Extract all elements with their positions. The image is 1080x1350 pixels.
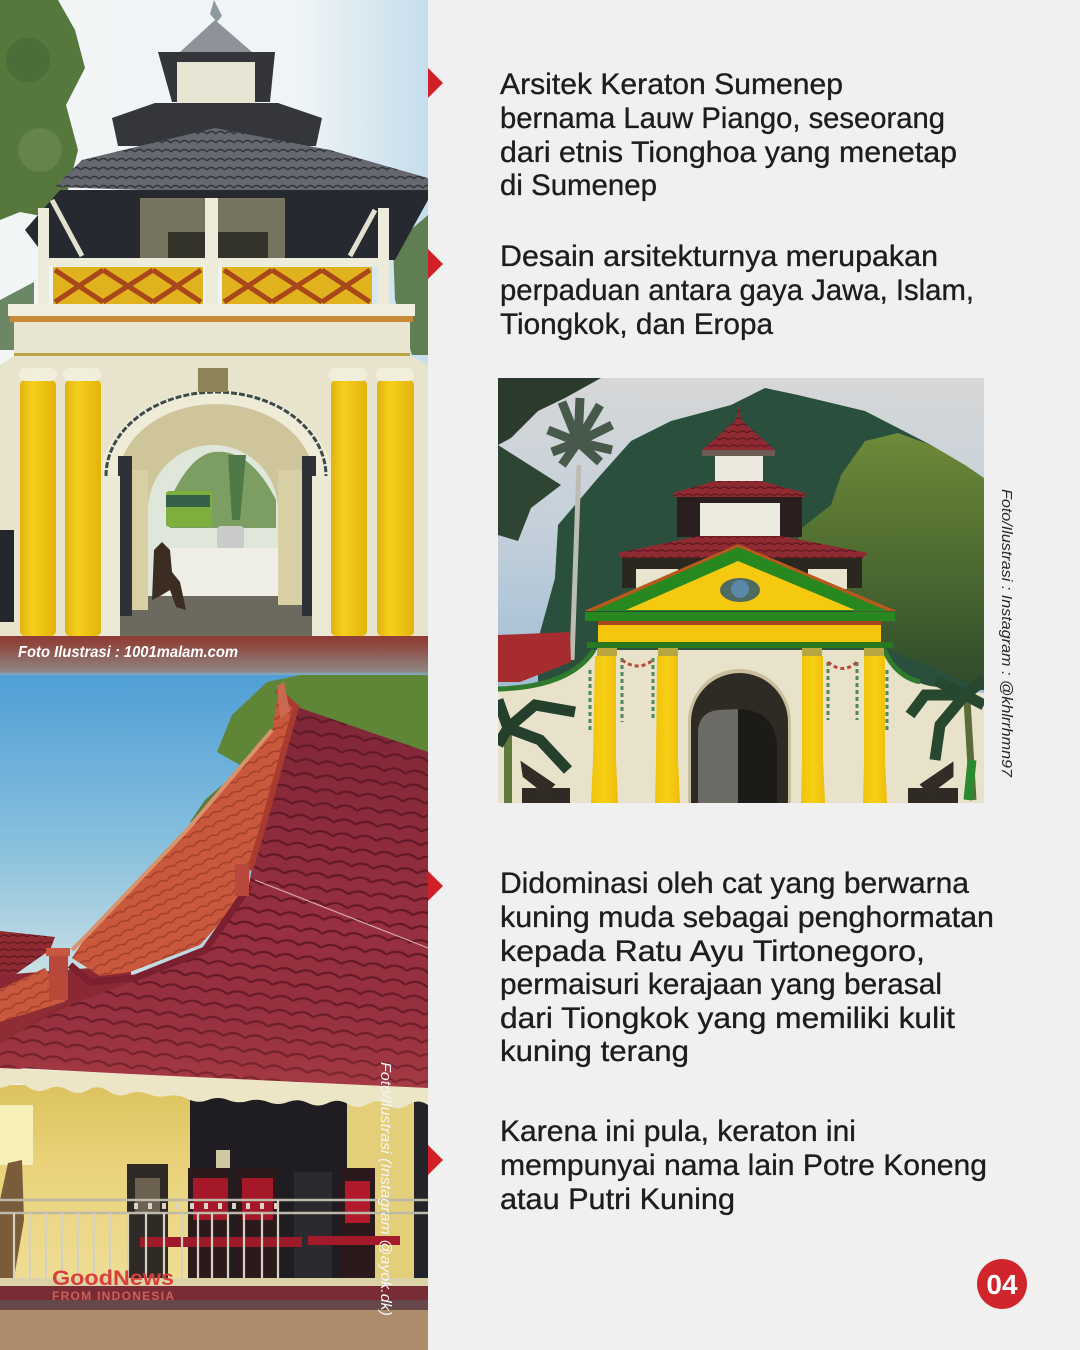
balustrade bbox=[53, 267, 372, 304]
bullet 4: mempunyai nama lain Potre Koneng bbox=[500, 1149, 987, 1182]
bullet 3: dari Tiongkok yang memiliki kulit bbox=[500, 1002, 956, 1035]
garlands bbox=[590, 658, 887, 730]
upper storey bbox=[25, 190, 428, 306]
photo: red roof pavilion bbox=[0, 675, 428, 1350]
cornice and wall bbox=[0, 304, 428, 640]
bullet 4 bbox=[428, 1115, 987, 1216]
logo: GoodNews from Indonesia bbox=[52, 1267, 174, 1303]
caption: photo 3 credit: Foto/Ilustrasi : Instagram : @khlrrhmn97 bbox=[998, 489, 1015, 778]
wall bbox=[498, 650, 984, 803]
chairs bbox=[0, 1160, 400, 1278]
bullet 1: dari etnis Tionghoa yang menetap bbox=[500, 136, 957, 169]
photo: gate tower bbox=[0, 0, 428, 675]
main roof dark slopes bbox=[0, 693, 428, 1090]
bullet 1: Arsitek Keraton Sumenep bbox=[500, 68, 843, 101]
left foliage bbox=[498, 378, 601, 541]
pediment bbox=[584, 544, 897, 648]
trees bbox=[0, 0, 428, 355]
bullet 3: kuning muda sebagai penghormatan bbox=[500, 901, 994, 934]
marker bbox=[428, 249, 443, 279]
bullet 3 bbox=[428, 867, 994, 1068]
palm tree bbox=[548, 398, 612, 660]
bullet 4: Karena ini pula, keraton ini bbox=[500, 1115, 856, 1148]
palm right bbox=[910, 680, 984, 800]
scalloped valance bbox=[0, 1068, 428, 1108]
cannons bbox=[522, 768, 958, 803]
main roof bbox=[55, 128, 428, 192]
pagoda upper tiers bbox=[618, 405, 868, 589]
roof backing bbox=[0, 968, 132, 1069]
bullet 3: kuning terang bbox=[500, 1035, 689, 1068]
columns bbox=[0, 368, 414, 636]
marker bbox=[428, 1145, 443, 1175]
caption: photo 2 credit: Foto/Ilustrasi (Instagram @ayok.dk) bbox=[377, 1062, 394, 1316]
bullet 3: kepada Ratu Ayu Tirtonegoro, bbox=[500, 935, 925, 968]
olive tree bbox=[798, 433, 984, 690]
bullet 4: atau Putri Kuning bbox=[500, 1183, 735, 1216]
bullet 3: Didominasi oleh cat yang berwarna bbox=[500, 867, 969, 900]
bullet 2: Tiongkok, dan Eropa bbox=[500, 308, 773, 341]
walls bbox=[0, 1085, 428, 1280]
bullet 2 bbox=[428, 240, 974, 341]
railing bbox=[0, 1200, 428, 1282]
curved green wall trim bbox=[498, 649, 920, 689]
ridge ornaments bbox=[46, 864, 249, 1000]
seated person bbox=[152, 542, 186, 610]
treetop bbox=[190, 675, 428, 822]
arch bbox=[688, 669, 791, 803]
emblem bbox=[720, 578, 760, 602]
palm left bbox=[498, 700, 575, 803]
bullet 2: perpaduan antara gaya Jawa, Islam, bbox=[500, 274, 974, 307]
logo: GoodNews from Indonesia: FROM INDONESIA bbox=[52, 1289, 174, 1303]
left lower roof bbox=[0, 931, 55, 975]
bullet 1: bernama Lauw Piango, seseorang bbox=[500, 102, 945, 135]
red wall left bbox=[498, 632, 571, 682]
orange roof facet bbox=[0, 682, 297, 1044]
page number badge bbox=[977, 1259, 1027, 1309]
arch bbox=[100, 390, 332, 640]
wire bbox=[255, 880, 428, 948]
bullet 2: Desain arsitekturnya merupakan bbox=[500, 240, 938, 273]
ground bbox=[0, 636, 428, 675]
columns bbox=[591, 648, 887, 803]
tower roof cap bbox=[112, 0, 322, 146]
bullet 1: di Sumenep bbox=[500, 169, 657, 202]
marker bbox=[428, 68, 443, 98]
ground bbox=[0, 1278, 428, 1350]
photo: yellow gate bbox=[498, 378, 984, 803]
caption: photo 1 credit: Foto Ilustrasi : 1001malam.com bbox=[18, 644, 238, 661]
logo: GoodNews from Indonesia: GoodNews bbox=[52, 1267, 174, 1290]
bullet 1 bbox=[428, 68, 957, 202]
marker bbox=[428, 871, 443, 901]
bullet 3: permaisuri kerajaan yang berasal bbox=[500, 968, 942, 1001]
big dark tree bbox=[538, 388, 984, 690]
page number badge: 04 bbox=[986, 1269, 1018, 1300]
